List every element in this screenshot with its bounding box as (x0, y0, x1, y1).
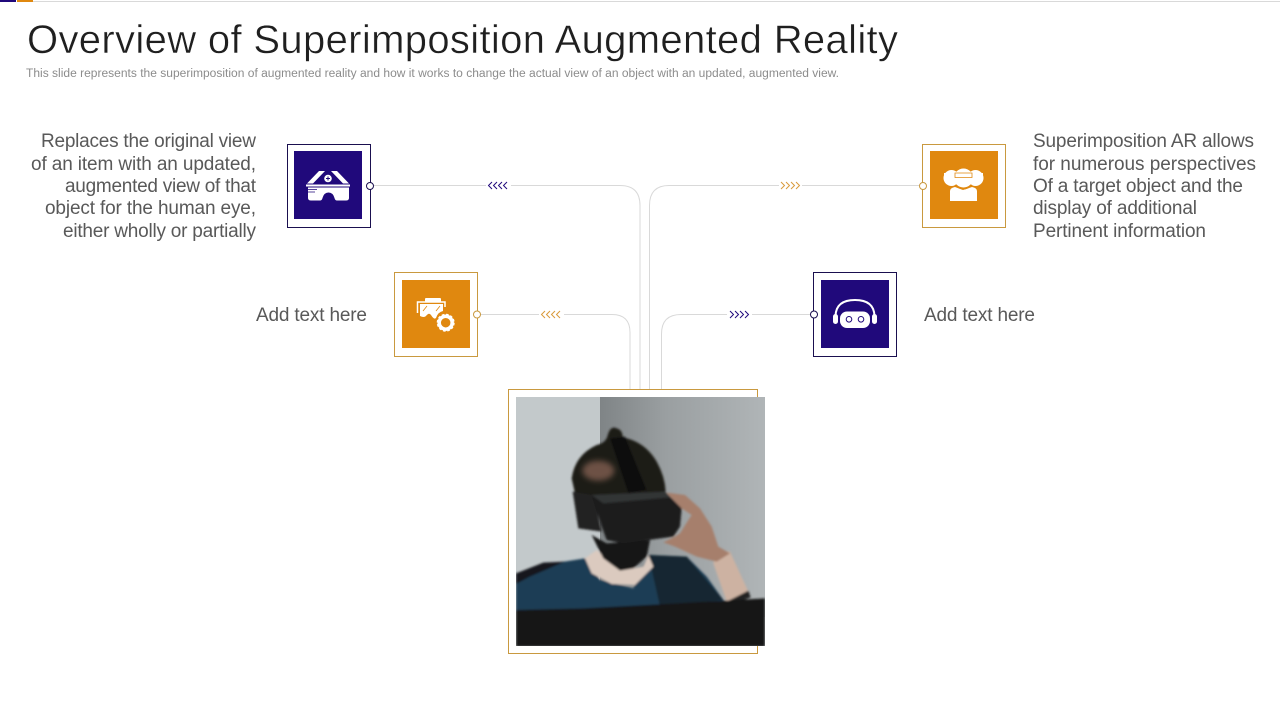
text block: top left: object for the human eye, (45, 198, 256, 219)
chevrons: middle right (730, 311, 748, 318)
icon tile: AR glasses, top left (288, 144, 374, 228)
text block: top left (31, 131, 257, 242)
text block: top left: Replaces the original view (41, 131, 256, 152)
text block: top right: Pertinent information (1033, 221, 1206, 242)
text block: top left: augmented view of that (65, 176, 257, 197)
photo: person wearing VR headset (516, 397, 765, 647)
chevrons: middle left (542, 311, 560, 318)
icon tile: VR robot with headphones, middle right (810, 272, 896, 356)
text: middle right: Add text here (924, 305, 1035, 326)
connector: middle right (662, 311, 810, 389)
subtitle: This slide represents the superimposition of augmented reality and how it works to change the actual view of an object with an updated, augmented view. (26, 68, 839, 80)
photo frame (508, 390, 758, 654)
connector: top left (374, 182, 640, 389)
connector: middle left (481, 311, 630, 389)
text block: top right: Of a target object and the (1033, 176, 1243, 197)
connector: top right (650, 182, 919, 389)
text block: top left: either wholly or partially (63, 221, 256, 242)
text block: top left: of an item with an updated, (31, 154, 256, 175)
text block: top right: display of additional (1033, 198, 1197, 219)
text block: top right: Superimposition AR allows (1033, 131, 1254, 152)
chevrons: top right (781, 182, 800, 189)
chevrons: top left (488, 182, 507, 189)
icon tile: group with headsets, top right (920, 144, 1006, 228)
text: middle left: Add text here (256, 305, 367, 326)
text block: top right (1033, 131, 1256, 242)
title: Overview of Superimposition Augmented Reality (27, 18, 898, 62)
top accent bar (0, 0, 33, 2)
text block: top right: for numerous perspectives (1033, 154, 1256, 175)
icon tile: VR headset with gear, middle left (394, 272, 480, 356)
